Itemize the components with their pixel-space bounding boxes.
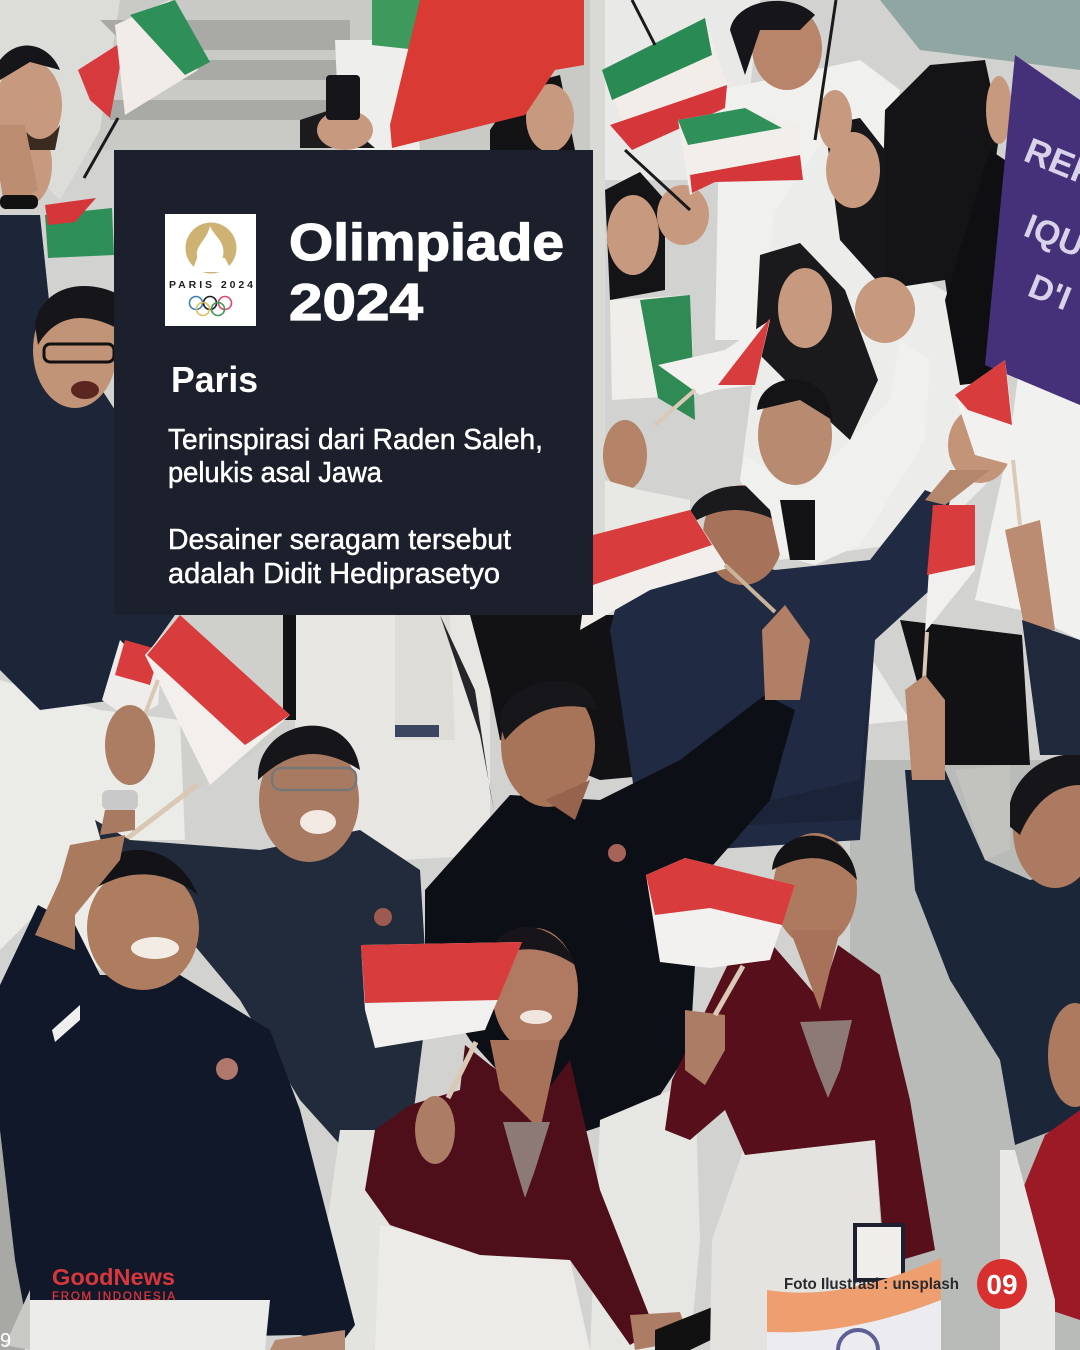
India flag bottom right — [767, 1258, 941, 1350]
man 3: black jacket — [425, 605, 810, 1350]
subtitle: Paris: Paris — [171, 359, 258, 400]
top white jackets and railing — [0, 0, 1080, 640]
white people mid — [0, 610, 910, 970]
brand: GoodNews from Indonesia: FROM INDONESIA — [52, 1291, 175, 1303]
title — [289, 214, 564, 332]
man 2: navy jacket with glasses — [95, 705, 428, 1350]
photo credit: Foto Ilustrasi : unsplash — [784, 1276, 959, 1293]
man hair top — [0, 1, 815, 150]
flag: red white upper left — [102, 615, 290, 840]
top faces — [0, 6, 1012, 348]
Iran flags — [45, 0, 803, 420]
right man navy — [905, 520, 1080, 1145]
woman 1: maroon velvet — [365, 927, 742, 1350]
dark trousers mid right — [283, 615, 1030, 780]
purple banner: D'I — [1023, 267, 1076, 318]
olympic rings — [190, 296, 232, 316]
text block: designer: adalah Didit Hediprasetyo — [168, 558, 500, 590]
logo: Paris 2024 — [165, 214, 256, 326]
page number badge — [977, 1259, 1027, 1309]
text block: designer — [168, 524, 511, 590]
text block: inspiration: Terinspirasi dari Raden Saleh, — [168, 424, 543, 456]
page number badge: 09 — [986, 1269, 1018, 1300]
man upper left, navy — [0, 125, 175, 710]
text block: designer: Desainer seragam tersebut — [168, 524, 511, 556]
flag: small red white right — [655, 318, 1020, 680]
brand: GoodNews from Indonesia — [52, 1264, 175, 1303]
logo text: PARIS 2024 — [169, 279, 253, 291]
right woman red — [1000, 1003, 1080, 1350]
title: Olimpiade — [289, 214, 564, 272]
dark hijab women — [300, 60, 1005, 440]
man 1: front navy jacket — [0, 835, 355, 1350]
man in navy mid right — [610, 407, 1012, 850]
flag: red white right centre — [646, 858, 795, 1015]
dark info panel — [114, 150, 593, 615]
flag poles — [84, 0, 836, 210]
purple banner — [985, 55, 1080, 405]
man in white centre — [603, 277, 930, 565]
text block: inspiration: pelukis asal Jawa — [168, 457, 383, 489]
flag: red white centre — [361, 942, 522, 1098]
logo flame emblem — [186, 222, 236, 274]
title: 2024 — [289, 274, 423, 332]
top red flag — [390, 0, 584, 148]
flag: red white mid right — [580, 510, 775, 630]
woman 2: maroon velvet — [665, 833, 935, 1350]
brand: GoodNews from Indonesia: GoodNews — [52, 1264, 175, 1290]
text block: inspiration — [168, 424, 543, 489]
